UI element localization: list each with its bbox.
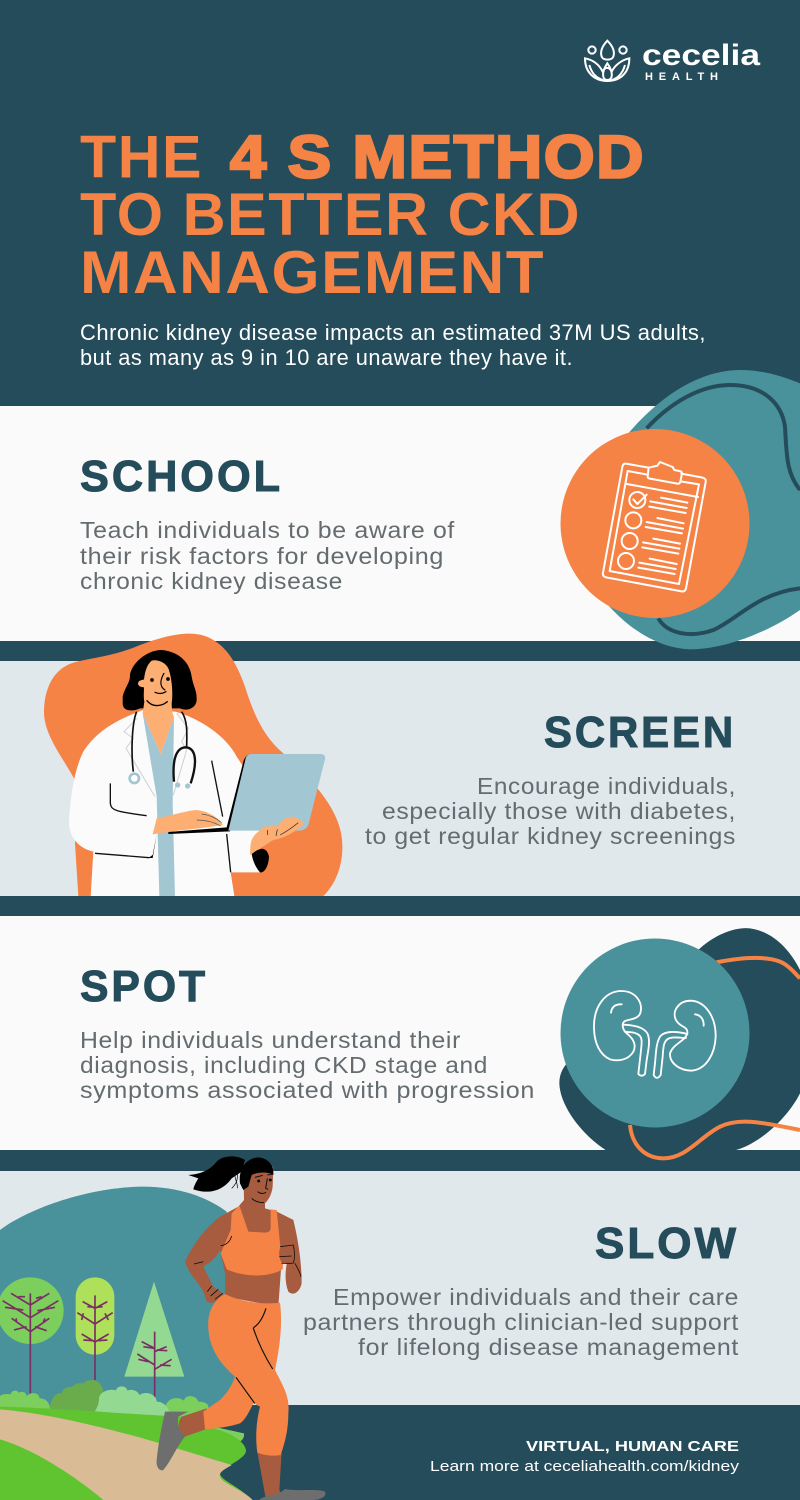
heading: spot: SPOT: [80, 962, 208, 1011]
blob: dark: [559, 928, 800, 1158]
text: spot: [80, 1027, 535, 1103]
doctor hair: [123, 650, 197, 710]
tree: capsule: [76, 1277, 114, 1380]
doctor cuff: [148, 834, 157, 858]
intro text: but as many as 9 in 10 are unaware they have it.: [80, 345, 573, 370]
heading: slow: SLOW: [595, 1219, 739, 1268]
panel: slow: [0, 1156, 739, 1500]
runner face: [252, 1174, 273, 1203]
doctor face lines: [147, 673, 169, 706]
illustration: doctor with laptop: [44, 634, 342, 896]
doctor scrubs: [143, 713, 175, 896]
icon circle: teal: [560, 938, 750, 1128]
title: TO BETTER CKD: [80, 181, 581, 248]
blob: teal: [607, 370, 800, 649]
band: spot: [0, 916, 800, 1150]
bushes: [0, 1380, 244, 1444]
text: spot: Help individuals understand their: [80, 1027, 461, 1053]
heading: school: SCHOOL: [80, 452, 283, 501]
text: screen: to get regular kidney screenings: [365, 823, 736, 849]
text: slow: Empower individuals and their care: [333, 1284, 739, 1310]
title: MANAGEMENT: [80, 239, 545, 306]
heading: screen: SCREEN: [544, 708, 736, 757]
icon circle: orange: [560, 429, 750, 618]
text: school: chronic kidney disease: [80, 568, 343, 594]
title: 4 S METHOD: [230, 124, 645, 190]
icon: kidneys: [594, 991, 716, 1078]
text: school: [80, 517, 455, 594]
footer text: [430, 1438, 740, 1475]
text: slow: [303, 1284, 739, 1360]
runner back leg: [179, 1408, 213, 1437]
tree: triangle: [124, 1282, 184, 1397]
title: THE: [80, 124, 203, 190]
doctor hand holding laptop: [250, 817, 304, 855]
text: school: their risk factors for developing: [80, 543, 444, 569]
intro text: Chronic kidney disease impacts an estimated 37M US adults,: [80, 320, 706, 345]
text: screen: especially those with diabetes,: [382, 798, 736, 824]
illustration: park and runner: [0, 1156, 325, 1500]
laptop: [168, 754, 253, 834]
panel: screen: [44, 634, 736, 896]
runner top: [221, 1205, 283, 1275]
park blob: [0, 1187, 240, 1417]
ground: [0, 1407, 252, 1500]
runner torso: [185, 1167, 295, 1307]
doctor face: [138, 660, 174, 754]
runner shoe back: [157, 1412, 188, 1470]
runner front shin: [257, 1452, 283, 1500]
intro text: [80, 320, 706, 370]
icon: lotus logo: [585, 41, 629, 81]
runner body lines: [194, 1236, 301, 1403]
panel: school: [80, 370, 800, 649]
logo subtitle: HEALTH: [645, 71, 718, 83]
stethoscope: [130, 712, 195, 789]
text: screen: [365, 773, 736, 849]
icon: clipboard: [603, 462, 706, 591]
text: school: Teach individuals to be aware of: [80, 517, 455, 543]
doctor sleeve cuff: [252, 849, 269, 872]
path: [0, 1409, 253, 1500]
tree: round: [0, 1277, 64, 1393]
runner hair: [240, 1157, 273, 1190]
band: school: [0, 406, 800, 641]
logo: Cecelia Health: [585, 39, 760, 83]
doctor lapels: [124, 713, 188, 797]
panel: spot: [80, 928, 800, 1158]
title: [80, 124, 645, 306]
runner: [157, 1156, 325, 1500]
doctor coat: [69, 710, 260, 896]
runner ponytail: [188, 1156, 245, 1192]
runner shoe front: [259, 1489, 325, 1500]
band: slow: [0, 1171, 800, 1405]
logo wordmark: cecelia: [642, 39, 760, 72]
text: slow: for lifelong disease management: [358, 1334, 739, 1360]
doctor hand on laptop: [153, 810, 223, 834]
text: spot: diagnosis, including CKD stage and: [80, 1052, 488, 1078]
band: screen: [0, 661, 800, 896]
footer text: Learn more at ceceliahealth.com/kidney: [430, 1458, 740, 1475]
coat lines: [95, 761, 231, 872]
runner leggings: [203, 1294, 289, 1456]
text: spot: symptoms associated with progression: [80, 1077, 535, 1103]
text: screen: Encourage individuals,: [477, 773, 736, 799]
text: slow: partners through clinician-led support: [303, 1309, 739, 1335]
doctor blob: [44, 634, 342, 896]
runner front arm: [277, 1212, 302, 1294]
footer text: VIRTUAL, HUMAN CARE: [526, 1438, 739, 1455]
